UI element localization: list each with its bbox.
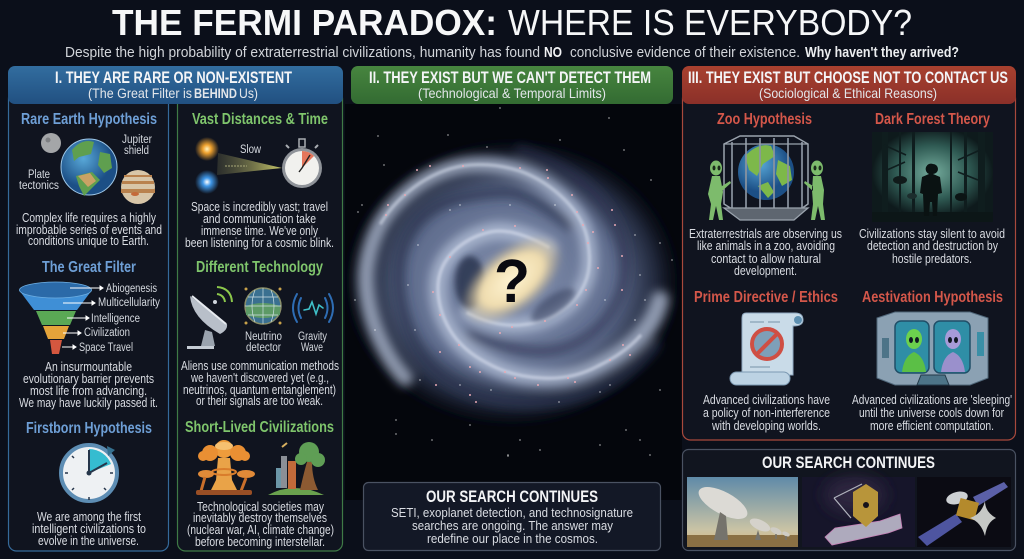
labels: neutrino detector and gravity wave: detector [246, 342, 281, 354]
text: Rare Earth description: Complex life requires a highly [22, 211, 157, 225]
subtitle: Why haven't they arrived? [805, 44, 959, 61]
text: Zoo description: contact to allow natural [711, 252, 821, 266]
subtitle: Despite the high probability of extraterrestrial civilizations, humanity has found [65, 44, 540, 61]
labels: neutrino detector and gravity wave: Neutrino [245, 331, 282, 343]
subtitle: NO [544, 44, 562, 61]
callout: our search continues: redefine our place in the cosmos. [427, 532, 598, 546]
text: Zoo description: like animals in a zoo, avoiding [697, 239, 835, 253]
heading: The Great Filter: The Great Filter [42, 259, 136, 276]
subtitle [65, 44, 959, 61]
image: spacecraft [917, 477, 1011, 547]
header: section I: BEHIND [194, 85, 237, 101]
text: Prime Directive description: a policy of non-interference [703, 406, 830, 420]
labels: neutrino detector and gravity wave [245, 331, 327, 354]
title: THE FERMI PARADOX: [112, 2, 497, 43]
label: Plate tectonics: Plate [28, 169, 50, 181]
heading: Zoo Hypothesis: Zoo Hypothesis [717, 111, 812, 128]
icon: scroll with prohibition sign [730, 313, 803, 385]
label: Plate tectonics: tectonics [19, 180, 59, 192]
heading: Different Technology: Different Technology [196, 259, 323, 276]
column: right hypotheses [178, 90, 342, 551]
text: Firstborn description [32, 510, 146, 548]
callout: our search continues: searches are ongoing. The answer may [412, 519, 614, 533]
panel: III. choose not to contact us [682, 66, 1016, 440]
text: Vast Distances description: and communication take [203, 212, 316, 226]
panel: our search continues images [682, 450, 1016, 550]
label: Jupiter shield [122, 134, 152, 157]
heading: Prime Directive: Prime Directive / Ethics [694, 289, 838, 306]
text: Vast Distances description: immense time. We've only [201, 224, 319, 238]
label: Jupiter shield: shield [124, 145, 149, 157]
text: Short-Lived description: inevitably destroy themselves [193, 511, 327, 525]
text: Dark Forest description [859, 227, 1005, 266]
panel: I. rare or non-existent [8, 66, 343, 551]
text: Short-Lived description: before becoming interstellar. [195, 535, 325, 549]
funnel labels [79, 283, 160, 354]
text: Rare Earth description: improbable series of events and [16, 223, 162, 237]
icon: stars and stopwatch [195, 137, 322, 194]
text: Short-Lived description [187, 500, 334, 549]
text: Zoo description: Extraterrestrials are observing us [689, 227, 842, 241]
text: Firstborn description: We are among the first [37, 510, 141, 524]
text: Different Technology description [181, 359, 339, 408]
text: Great Filter description: most life from advancing. [30, 384, 147, 398]
heading: our search continues: OUR SEARCH CONTINUES [762, 454, 935, 472]
labels: neutrino detector and gravity wave: Wave [301, 342, 323, 354]
callout: our search continues [364, 482, 660, 550]
header: section I [8, 66, 343, 104]
text: Zoo description [689, 227, 842, 278]
icon: clock [61, 445, 117, 501]
text: Zoo description: development. [734, 264, 797, 278]
image: radio telescope array [687, 477, 798, 547]
callout: our search continues: OUR SEARCH CONTINUES [426, 488, 598, 506]
text: Vast Distances description: been listening for a cosmic blink. [185, 236, 334, 250]
text: Prime Directive description: with developing worlds. [711, 419, 821, 433]
text: Different Technology description: or their signals are too weak. [196, 394, 323, 408]
icon: collapsing city and tree [268, 442, 325, 495]
icon: Earth in cage with aliens [708, 136, 825, 220]
text: Firstborn description: intelligent civilizations to [32, 522, 146, 536]
icon: gravity wave [293, 294, 333, 322]
text: Vast Distances description: Space is incredibly vast; travel [191, 200, 328, 214]
icon: neutrino detector globe [244, 288, 282, 324]
funnel labels: Civilization [84, 327, 130, 339]
image: dark forest [872, 132, 993, 222]
label: Jupiter shield: Jupiter [122, 134, 152, 146]
funnel labels: Intelligence [91, 313, 140, 325]
title: WHERE IS EVERYBODY? [508, 2, 912, 43]
text: Dark Forest description: hostile predators. [892, 252, 972, 266]
text: Firstborn description: evolve in the universe. [38, 534, 139, 548]
text: Great Filter description: An insurmountable [45, 360, 132, 374]
header: section II [351, 66, 673, 104]
funnel labels: Multicellularity [98, 297, 160, 309]
galaxy illustration [340, 108, 684, 456]
label: Plate tectonics [19, 169, 59, 192]
question mark: ? [494, 247, 530, 315]
labels: neutrino detector and gravity wave: Gravity [298, 331, 327, 343]
text: Rare Earth description: conditions unique to Earth. [28, 234, 149, 248]
header: section I: (The Great Filter is [88, 85, 192, 101]
header: section III: (Sociological & Ethical Reasons) [759, 85, 937, 101]
text: Aestivation description [852, 393, 1012, 433]
text: Different Technology description: we haven't discovered yet (e.g., [190, 371, 329, 385]
icon: stasis pods with sleeping aliens [877, 312, 988, 385]
text: Prime Directive description [703, 393, 830, 433]
heading: Dark Forest Theory: Dark Forest Theory [875, 111, 990, 128]
text: Aestivation description: more efficient computation. [870, 419, 994, 433]
icon: radio dish [187, 287, 232, 349]
heading: Firstborn Hypothesis: Firstborn Hypothesis [26, 420, 152, 437]
heading: Vast Distances & Time: Vast Distances & Time [192, 111, 328, 128]
text: Short-Lived description: Technological societies may [197, 500, 325, 514]
text: Great Filter description: We may have luckily passed it. [19, 396, 158, 410]
header: section I: I. THEY ARE RARE OR NON-EXISTENT [55, 69, 292, 87]
text: Short-Lived description: (nuclear war, AI, climate change) [187, 523, 334, 537]
heading: Rare Earth Hypothesis: Rare Earth Hypothesis [21, 111, 157, 128]
title [112, 2, 912, 43]
icon: Earth with moon and Jupiter [41, 133, 155, 204]
text: Great Filter description: evolutionary barrier prevents [23, 372, 154, 386]
header: section II: II. THEY EXIST BUT WE CAN'T DETECT THEM [369, 69, 651, 87]
heading: Short-Lived Civilizations: Short-Lived Civilizations [185, 419, 334, 436]
text: Great Filter description [19, 360, 158, 410]
callout: our search continues: SETI, exoplanet detection, and technosignature [391, 506, 633, 520]
text: Rare Earth description [16, 211, 162, 248]
chart: funnel [19, 282, 103, 354]
funnel labels: Space Travel [79, 342, 133, 354]
subtitle: conclusive evidence of their existence. [570, 44, 800, 61]
column: left hypotheses [8, 90, 168, 551]
funnel labels: Abiogenesis [106, 283, 157, 295]
text: Different Technology description: neutrinos, quantum entanglement) [183, 383, 336, 397]
header: section II: (Technological & Temporal Limits) [418, 85, 606, 101]
text: Prime Directive description: Advanced civilizations have [703, 393, 830, 407]
header: section I: Us) [239, 85, 258, 101]
text: Vast Distances description [185, 200, 334, 250]
label: Slow: Slow [240, 144, 262, 156]
text: Dark Forest description: detection and destruction by [867, 239, 999, 253]
galaxy background column [345, 104, 682, 500]
image: space telescope [802, 477, 915, 547]
icon: mushroom cloud [196, 440, 255, 495]
header: section III [682, 66, 1016, 104]
text: Different Technology description: Aliens use communication methods [181, 359, 339, 373]
